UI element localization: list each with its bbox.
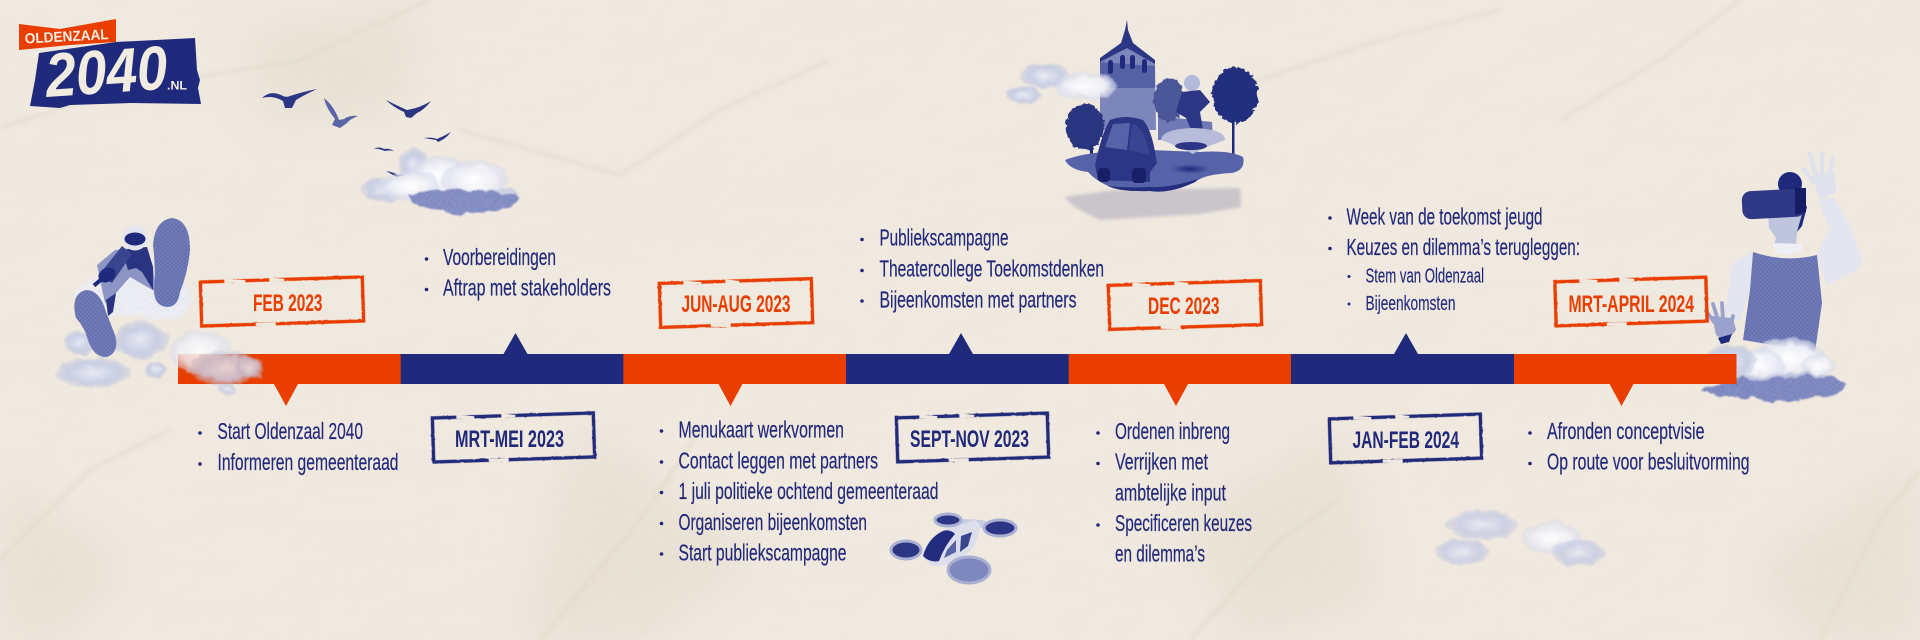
text: sept-nov 2023 activities: Theatercollege Toekomstdenken xyxy=(880,256,1104,282)
logo orange banner xyxy=(19,19,116,50)
segment sept-nov 2023 xyxy=(846,354,1069,384)
logo suffix .nl: .NL xyxy=(167,78,187,92)
illustration: clouds bottom right xyxy=(1435,510,1605,566)
text: jun-aug 2023 activities: 1 juli politieke ochtend gemeenteraad xyxy=(678,478,938,504)
segment mrt-april 2024 xyxy=(1514,354,1736,384)
lower hand xyxy=(1706,303,1736,344)
stamp: MRT-APRIL 2024 xyxy=(1555,275,1707,328)
illustration: seagulls xyxy=(262,89,451,177)
stamp: FEB 2023 xyxy=(200,274,364,329)
stamp: DEC 2023: DEC 2023 xyxy=(1148,293,1220,320)
text: jun-aug 2023 activities: Contact leggen met partners xyxy=(678,447,878,473)
island shadow xyxy=(1064,188,1241,220)
flying saucer fountain xyxy=(1161,128,1225,154)
text: jan-feb 2024 activities: Bijeenkomsten xyxy=(1366,292,1456,315)
text: jan-feb 2024 activities: Keuzes en dilemma’s terugleggen: xyxy=(1346,234,1580,260)
illustration: town island with tower and pod xyxy=(1006,20,1258,220)
clouds near tower xyxy=(1006,64,1070,104)
text: dec 2023 activities: Ordenen inbreng xyxy=(1115,418,1230,444)
drone cabin xyxy=(922,520,980,566)
text: dec 2023 activities: ambtelijke input xyxy=(1115,479,1226,505)
text: jan-feb 2024 activities: Week van de toekomst jeugd xyxy=(1346,203,1542,229)
text: mrt-mei 2023 activities: Aftrap met stakeholders xyxy=(443,275,611,301)
text: mrt-april 2024 activities: Afronden conceptvisie xyxy=(1547,418,1704,444)
segment jun-aug 2023 xyxy=(623,354,846,384)
neck and face xyxy=(1768,214,1802,245)
segment feb 2023 xyxy=(178,354,401,384)
stamp: SEPT-NOV 2023 xyxy=(896,411,1049,464)
text: mrt-april 2024 activities xyxy=(1528,418,1750,474)
raised arm xyxy=(1817,197,1862,285)
segment jan-feb 2024 xyxy=(1291,354,1514,384)
stamp: JAN-FEB 2024 xyxy=(1329,412,1482,465)
stamp: FEB 2023: FEB 2023 xyxy=(253,290,322,317)
text: dec 2023 activities: Verrijken met xyxy=(1115,449,1208,475)
cloud over tower xyxy=(1053,72,1117,100)
drone upper arm xyxy=(945,518,998,528)
self driving pod xyxy=(1095,117,1157,183)
illustration: cloud over bar start xyxy=(170,330,264,397)
raised hand xyxy=(1804,153,1836,200)
text: jun-aug 2023 activities: Menukaart werkvormen xyxy=(678,416,844,442)
left sleeve xyxy=(1725,252,1752,322)
astronaut jacket and legs xyxy=(97,247,156,303)
stamp: JAN-FEB 2024: JAN-FEB 2024 xyxy=(1352,427,1459,454)
logo number 2040: 2040 xyxy=(42,34,170,111)
text: jan-feb 2024 activities xyxy=(1328,203,1580,315)
text: dec 2023 activities xyxy=(1096,418,1252,567)
church tower xyxy=(1100,20,1156,130)
illustration: flying drone taxi xyxy=(891,514,1016,583)
stamp: SEPT-NOV 2023: SEPT-NOV 2023 xyxy=(910,426,1029,453)
text: jun-aug 2023 activities: Start publiekscampagne xyxy=(678,539,846,565)
text: mrt-april 2024 activities: Op route voor besluitvorming xyxy=(1547,448,1750,474)
bun and hair xyxy=(1778,172,1802,196)
logo: Oldenzaal 2040.nl xyxy=(19,19,201,111)
stamp: MRT-APRIL 2024: MRT-APRIL 2024 xyxy=(1568,291,1694,318)
text: feb 2023 activities: Start Oldenzaal 2040 xyxy=(218,418,363,444)
text: jun-aug 2023 activities xyxy=(660,416,938,565)
VR headset xyxy=(1741,188,1806,220)
segment dec 2023 xyxy=(1069,354,1292,384)
binoculars xyxy=(99,246,132,283)
logo navy flag xyxy=(30,38,201,108)
illustration: woman with VR headset xyxy=(1700,153,1862,402)
text: sept-nov 2023 activities: Bijeenkomsten met partners xyxy=(880,286,1076,312)
cloud at woman's base xyxy=(1700,338,1846,402)
text: dec 2023 activities: en dilemma’s xyxy=(1115,541,1205,567)
stamp: JUN-AUG 2023 xyxy=(659,277,813,329)
stamp: DEC 2023 xyxy=(1108,279,1262,331)
text: jun-aug 2023 activities: Organiseren bijeenkomsten xyxy=(678,509,867,535)
sleeveless top xyxy=(1743,252,1822,352)
text: feb 2023 activities: Informeren gemeenteraad xyxy=(218,449,398,475)
child statue xyxy=(1176,75,1210,132)
stamp: MRT-MEI 2023: MRT-MEI 2023 xyxy=(455,426,564,453)
text: dec 2023 activities: Specificeren keuzes xyxy=(1115,510,1252,536)
text: feb 2023 activities xyxy=(198,418,398,475)
text: jan-feb 2024 activities: Stem van Oldenzaal xyxy=(1366,265,1484,288)
text: mrt-mei 2023 activities xyxy=(425,244,611,301)
text: sept-nov 2023 activities: Publiekscampagne xyxy=(880,225,1008,251)
island ground xyxy=(1065,150,1244,192)
stamp: MRT-MEI 2023 xyxy=(432,410,595,465)
segment mrt-mei 2023 xyxy=(401,354,624,384)
rotors xyxy=(891,514,1016,583)
illustration: astronaut with binoculars on clouds xyxy=(55,218,192,388)
clouds under astronaut xyxy=(55,276,192,388)
logo word Oldenzaal: OLDENZAAL xyxy=(24,27,109,47)
text: sept-nov 2023 activities xyxy=(860,225,1104,312)
stamp: JUN-AUG 2023: JUN-AUG 2023 xyxy=(682,291,790,318)
timeline bar xyxy=(178,333,1736,406)
boot soles xyxy=(153,218,190,307)
helmet xyxy=(122,226,148,250)
illustration: cloud top xyxy=(360,147,519,214)
church hall and trees xyxy=(1158,116,1213,140)
text: mrt-mei 2023 activities: Voorbereidingen xyxy=(443,244,556,270)
pointers xyxy=(274,333,1634,406)
